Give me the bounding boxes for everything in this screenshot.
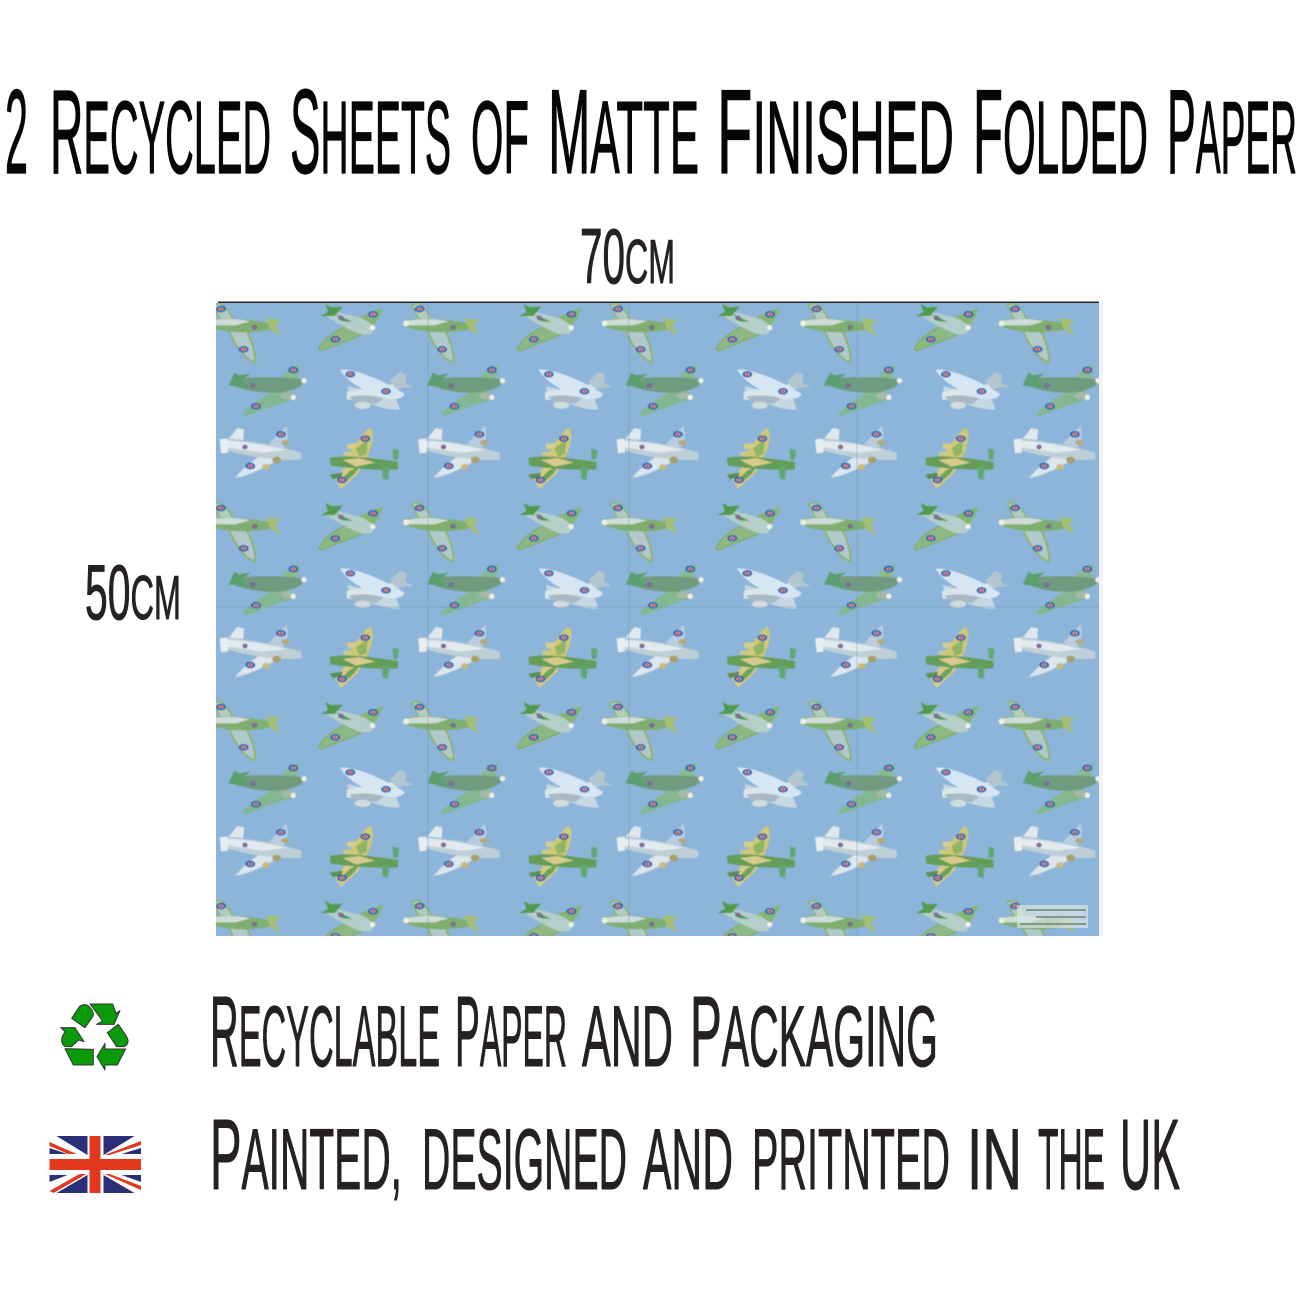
panel: wrapping paper sheet with aircraft pattern xyxy=(216,302,1103,936)
title: 2 xyxy=(5,65,28,199)
origin statement: PRITNTED xyxy=(752,1112,950,1208)
recyclable statement: PAPER xyxy=(455,976,567,1088)
recyclable statement: PACKAGING xyxy=(690,976,938,1088)
icon: UK flag xyxy=(50,1136,141,1193)
height label: 50cm: 50CM xyxy=(85,548,181,636)
width label: 70cm: 70CM xyxy=(580,212,675,300)
origin statement: PAINTED, xyxy=(210,1099,402,1211)
title xyxy=(5,65,1297,199)
text: UK xyxy=(1120,1099,1180,1211)
recyclable statement: RECYCLABLE xyxy=(210,976,440,1088)
title: MATTE xyxy=(548,65,699,199)
origin statement xyxy=(210,1099,1180,1211)
recyclable statement: AND xyxy=(582,989,673,1085)
title: RECYCLED xyxy=(50,65,271,199)
title: OF xyxy=(471,80,529,195)
title: SHEETS xyxy=(290,65,451,199)
origin statement: AND xyxy=(643,1112,733,1208)
origin statement: IN xyxy=(967,1112,1022,1208)
icon: recycling symbol xyxy=(61,1004,128,1070)
origin statement: THE xyxy=(1038,1112,1105,1208)
origin statement: DESIGNED xyxy=(422,1112,627,1208)
title: FINISHED xyxy=(717,65,954,199)
